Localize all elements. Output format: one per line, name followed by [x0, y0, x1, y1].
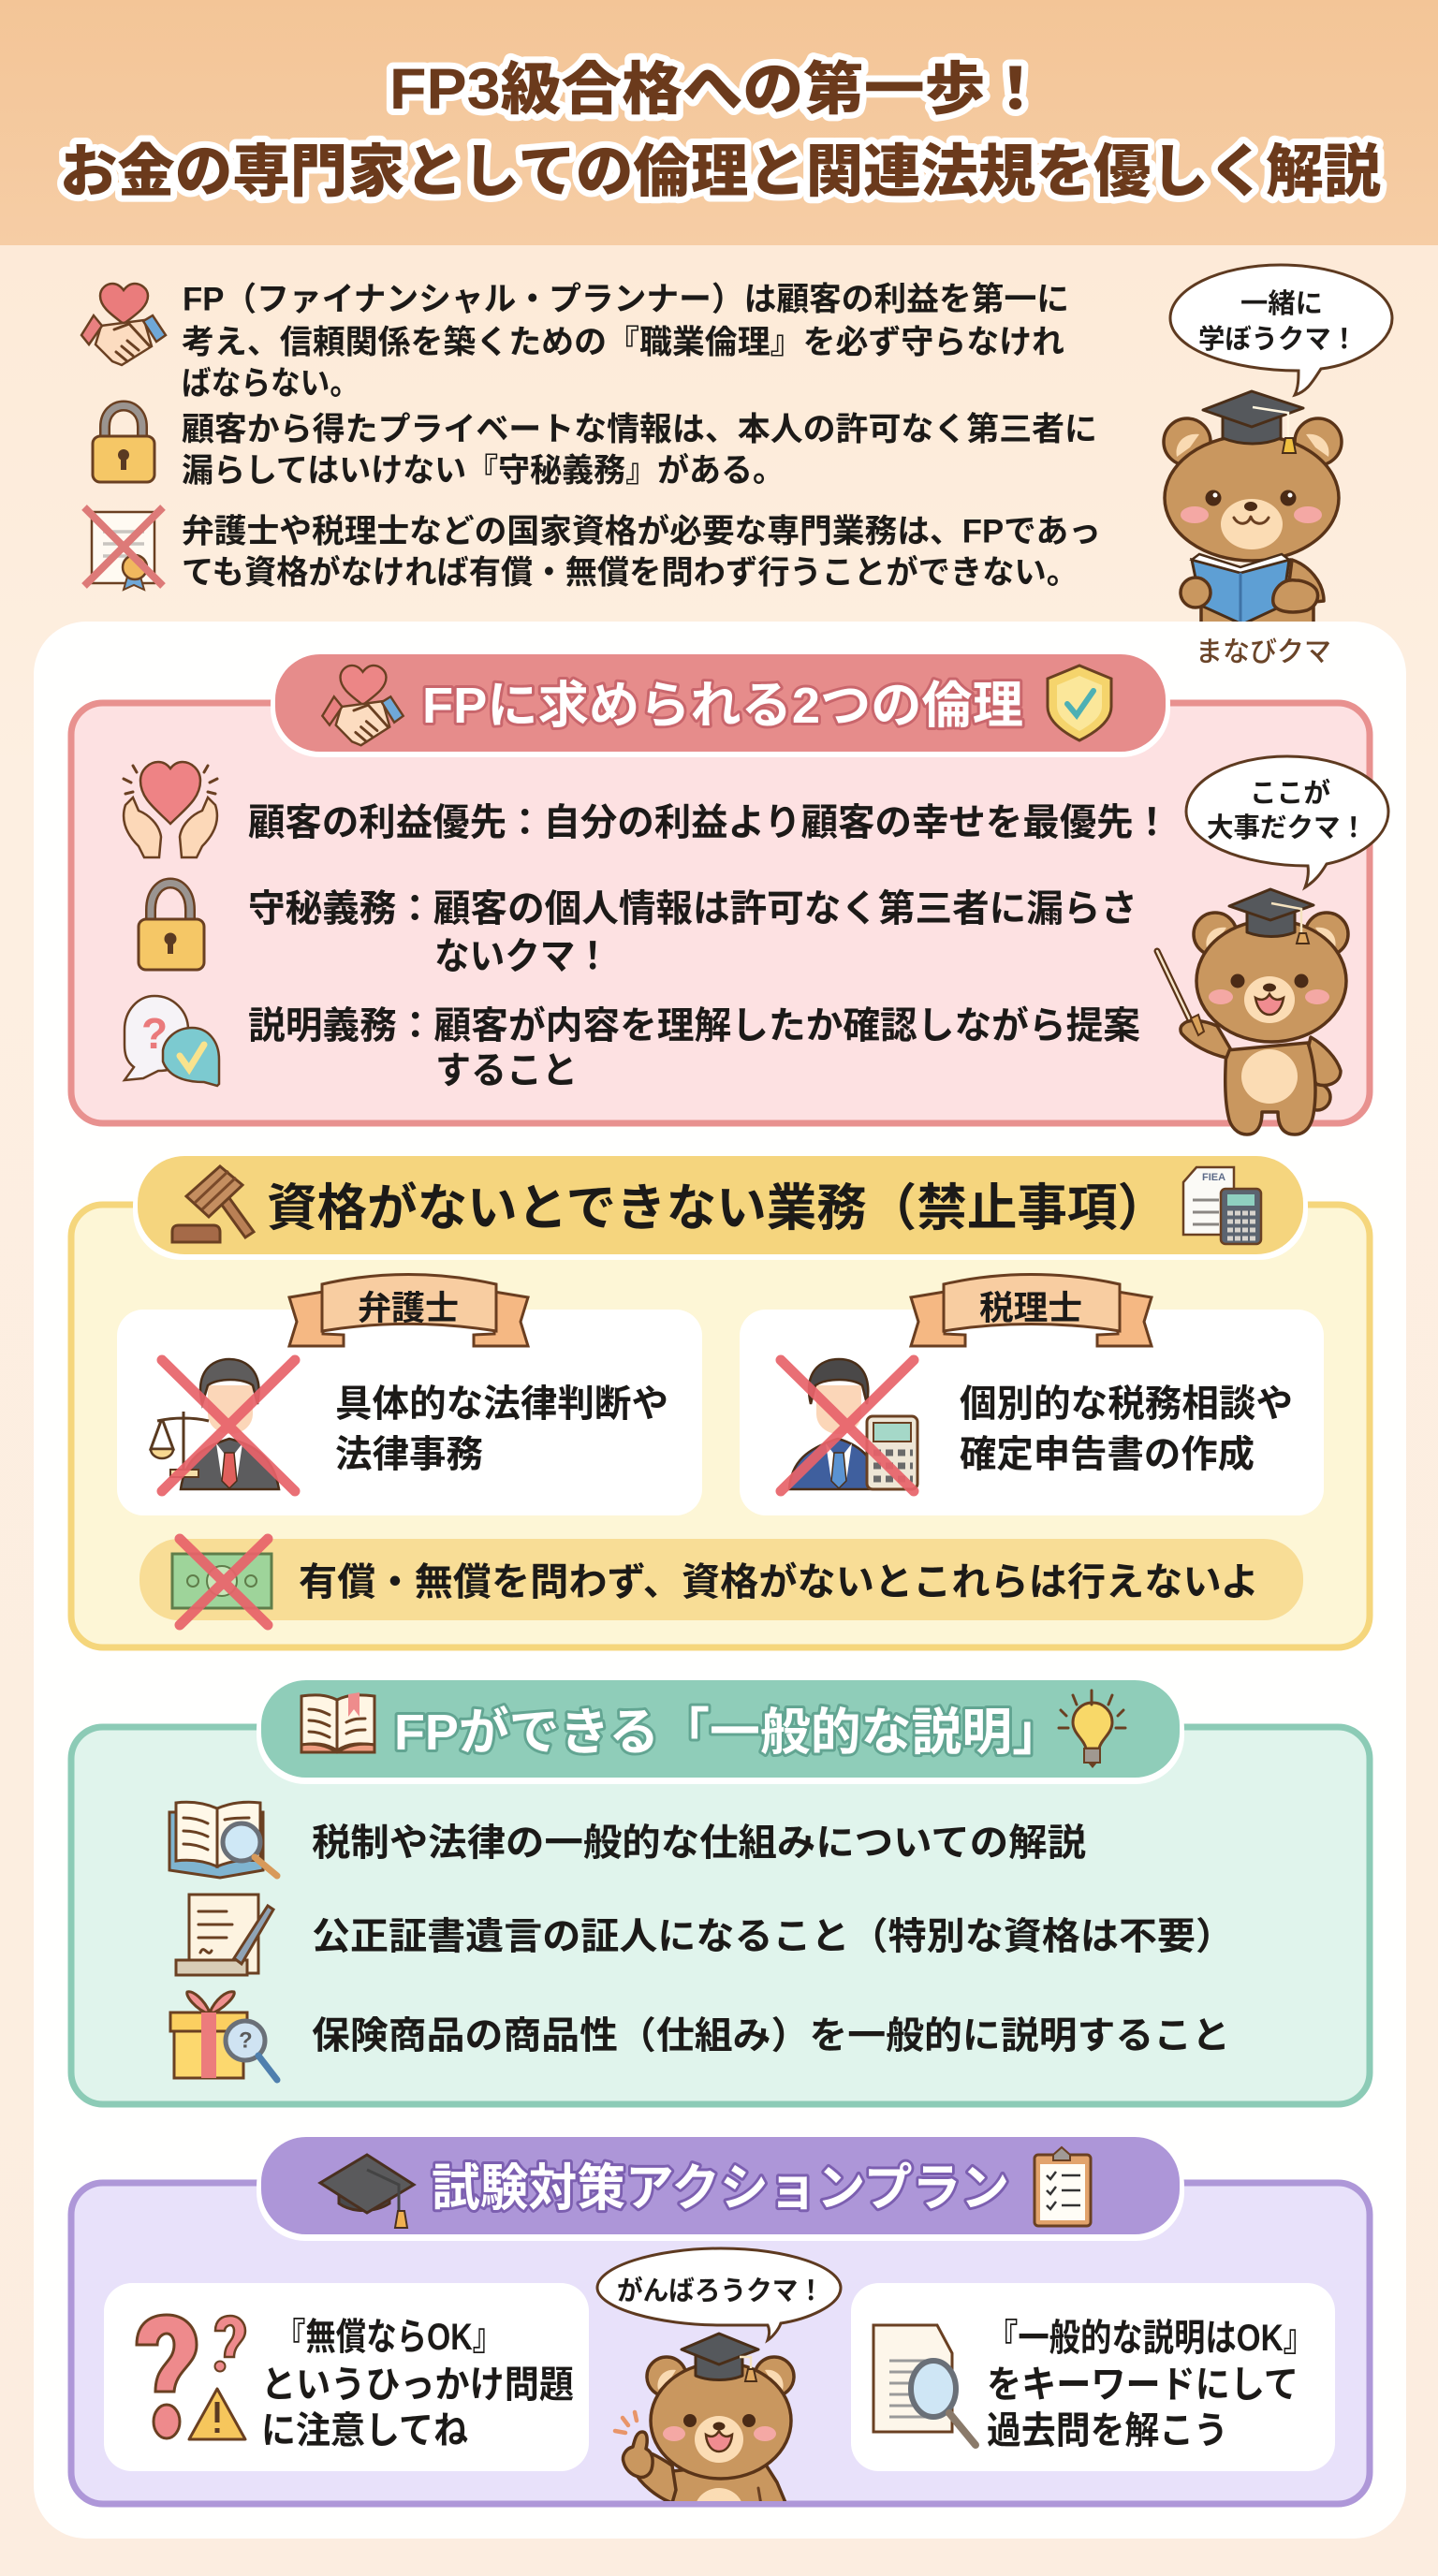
bear: teacher with pointer — [1157, 889, 1348, 1134]
callout: paid or unpaid — [139, 1539, 1303, 1625]
heading pill: prohibited — [133, 1156, 1308, 1260]
heading pill: ethics: FPに求められる2つの倫理 — [422, 678, 1023, 734]
item: insurance explanation — [170, 1992, 1230, 2080]
item: insurance explanation: 保険商品の商品性（仕組み）を一般的に説明すること — [312, 2015, 1230, 2056]
panel: exam action plan — [71, 2137, 1370, 2533]
ribbon: lawyer: 弁護士 — [358, 1288, 459, 1327]
icon: question marks and warning — [137, 2315, 245, 2439]
icon: scroll and pen — [176, 1895, 273, 1975]
heading pill: action plan: 試験対策アクションプラン — [432, 2160, 1009, 2217]
icon: shield — [1048, 666, 1111, 740]
item: confidentiality: 守秘義務：顧客の個人情報は許可なく第三者に漏らさ — [248, 888, 1137, 929]
icon: lawyer crossed — [151, 1359, 295, 1491]
speech bubble: do our best: がんばろうクマ！ — [617, 2275, 824, 2306]
panel: prohibited work — [71, 1156, 1370, 1647]
text: ethics — [182, 281, 1069, 402]
item: client interest: 顧客の利益優先：自分の利益より顧客の幸せを最優先！ — [248, 802, 1170, 843]
text: confidentiality: 漏らしてはいけない『守秘義務』がある。 — [182, 453, 785, 489]
icon: crossed certificate — [84, 507, 163, 590]
icon: padlock — [139, 884, 204, 970]
text: licensed work — [182, 513, 1101, 592]
bear: thumbs up — [612, 2333, 796, 2501]
item: explanation duty — [125, 996, 1140, 1091]
text: licensed work: 弁護士や税理士などの国家資格が必要な専門業務は、FPであっ — [182, 513, 1101, 550]
item: general tax explanation — [169, 1802, 1086, 1878]
header banner — [0, 0, 1438, 245]
speech bubble: important: ここが — [1250, 777, 1330, 809]
icon: gift and magnifier: ? — [239, 2027, 253, 2054]
card: trick question — [104, 2283, 589, 2471]
icon: document and calculator — [1183, 1167, 1261, 1244]
icon: heart handshake — [81, 284, 166, 365]
title — [60, 57, 1381, 203]
item: will witness — [176, 1895, 1234, 1975]
icon: gavel — [172, 1166, 254, 1242]
card: keyword practice: 『一般的な説明はOK』 — [987, 2318, 1314, 2359]
icon: book and magnifier — [169, 1802, 277, 1878]
icon: tax accountant crossed — [781, 1359, 917, 1491]
name label: まなびクマ — [1196, 637, 1331, 668]
icon: heart in hands — [124, 762, 217, 857]
panel: general explanation — [71, 1680, 1370, 2104]
speech bubble: learn together: 学ぼうクマ！ — [1198, 324, 1357, 355]
card: trick question: というひっかけ問題 — [261, 2364, 574, 2406]
ribbon: lawyer — [289, 1275, 528, 1346]
icon: crossed money — [172, 1539, 271, 1625]
speech bubble: learn together — [1170, 265, 1392, 395]
ribbon: tax accountant: 税理士 — [979, 1288, 1082, 1327]
item: client interest — [124, 762, 1170, 857]
main white panel — [34, 622, 1406, 2539]
item: will witness: 公正証書遺言の証人になること（特別な資格は不要） — [312, 1916, 1234, 1957]
text: ethics: FP（ファイナンシャル・プランナー）は顧客の利益を第一に — [183, 281, 1069, 318]
card: tax accountant: 確定申告書の作成 — [960, 1434, 1255, 1475]
speech bubble: important: 大事だクマ！ — [1207, 812, 1367, 843]
item: confidentiality — [139, 884, 1137, 977]
card: keyword practice: 過去問を解こう — [987, 2410, 1228, 2452]
card: tax accountant — [740, 1275, 1324, 1515]
card: lawyer: 法律事務 — [335, 1434, 483, 1475]
heading pill: general: FPができる「一般的な説明」 — [394, 1705, 1063, 1761]
intro summary — [81, 281, 1101, 592]
text: confidentiality — [182, 412, 1097, 489]
text: ethics: 考え、信頼関係を築くための『職業倫理』を必ず守らなけれ — [182, 324, 1064, 361]
bear: reading with book — [1164, 391, 1342, 629]
text: confidentiality: 顧客から得たプライベートな情報は、本人の許可なく第三者に — [182, 412, 1097, 447]
icon: question and check bubbles: ? — [141, 1009, 168, 1058]
item: explanation duty: すること — [435, 1050, 578, 1091]
icon: heart handshake — [322, 666, 404, 745]
icon: padlock — [93, 406, 154, 482]
item: general tax explanation: 税制や法律の一般的な仕組みについての解説 — [312, 1822, 1086, 1864]
ribbon: tax accountant — [911, 1275, 1152, 1346]
card: keyword practice: をキーワードにして — [987, 2364, 1299, 2406]
text: ethics: ばならない。 — [182, 365, 360, 402]
card: tax accountant: 個別的な税務相談や — [960, 1383, 1293, 1425]
speech bubble: important — [1186, 756, 1388, 887]
speech bubble: learn together: 一緒に — [1240, 288, 1323, 319]
icon: open book — [301, 1692, 374, 1752]
title: お金の専門家としての倫理と関連法規を優しく解説 — [60, 139, 1381, 203]
card: lawyer — [117, 1275, 702, 1515]
icon: document and magnifier — [873, 2325, 976, 2445]
card: lawyer: 具体的な法律判断や — [335, 1383, 668, 1425]
item: explanation duty: 説明義務：顧客が内容を理解したか確認しながら提案 — [248, 1005, 1140, 1046]
icon: document and calculator: FIEA — [1202, 1172, 1225, 1183]
callout: paid or unpaid: 有償・無償を問わず、資格がないとこれらは行えないよ — [299, 1560, 1259, 1603]
icon: gift and magnifier — [170, 1992, 277, 2080]
panel: two ethics — [71, 654, 1370, 1123]
speech bubble: do our best — [597, 2248, 841, 2340]
item: confidentiality: ないクマ！ — [434, 936, 610, 977]
icon: question and check bubbles — [125, 996, 219, 1086]
title: FP3級合格への第一歩！ — [389, 57, 1046, 121]
heading pill: general — [257, 1680, 1184, 1784]
icon: clipboard — [1034, 2147, 1091, 2226]
icon: graduation cap — [320, 2155, 414, 2228]
heading pill: prohibited: 資格がないとできない業務（禁止事項） — [267, 1180, 1167, 1237]
card: trick question: に注意してね — [261, 2410, 468, 2452]
card: trick question: 『無償ならOK』 — [275, 2317, 503, 2358]
icon: light bulb — [1059, 1690, 1125, 1768]
card: keyword practice — [851, 2283, 1335, 2471]
heading pill: action plan — [257, 2137, 1184, 2241]
text: licensed work: ても資格がなければ有償・無償を問わず行うことができない。 — [182, 554, 1078, 592]
heading pill: ethics — [271, 654, 1170, 757]
